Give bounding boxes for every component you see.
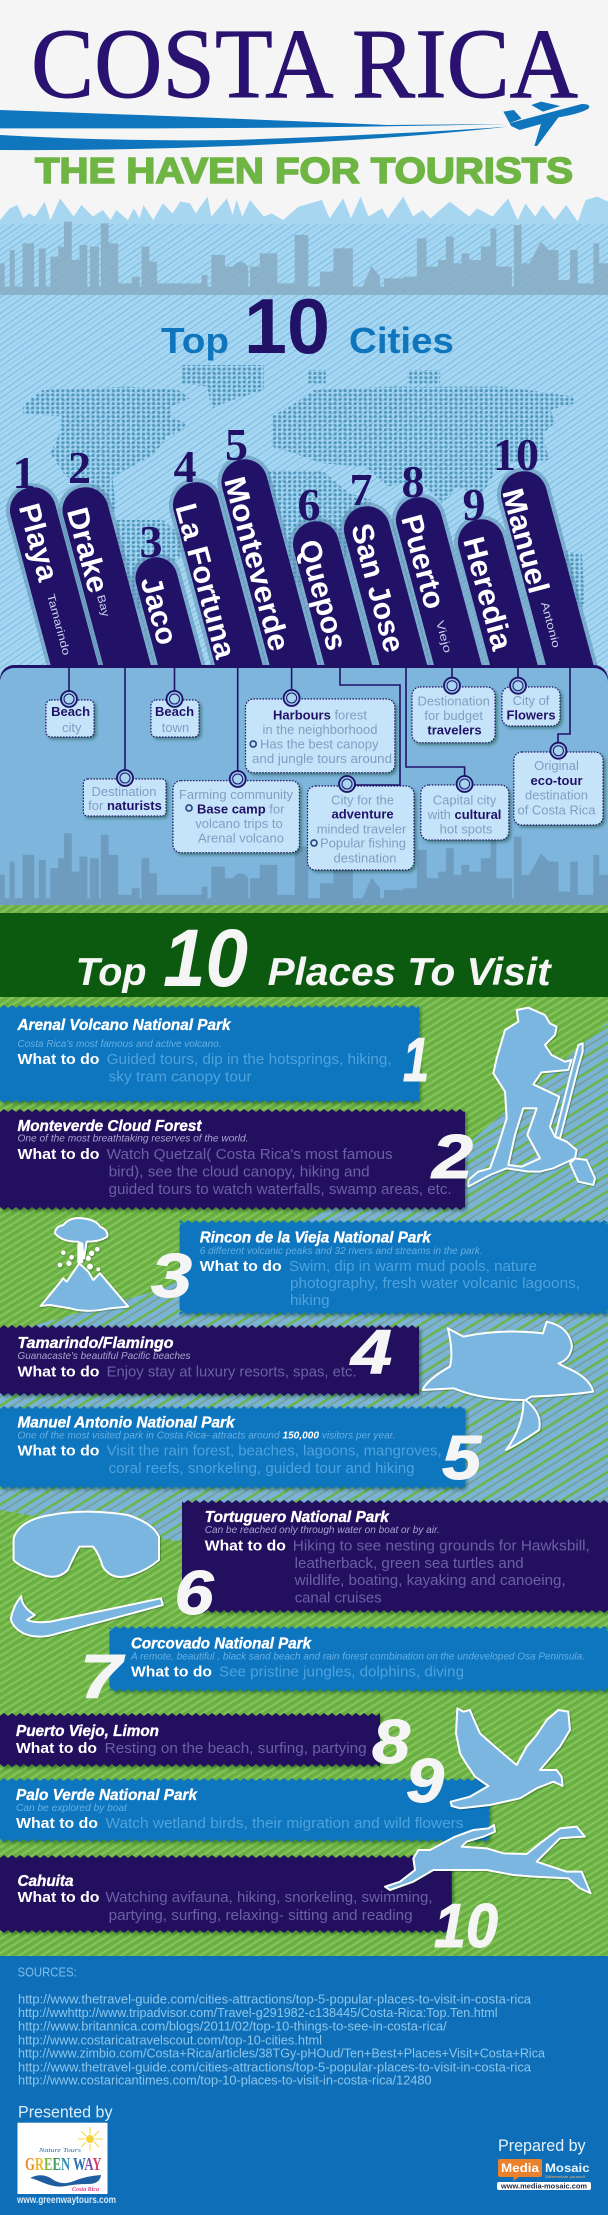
number 10: 10 bbox=[434, 1892, 498, 1961]
place 8: Puerto Viejo: 8 bbox=[372, 1708, 411, 1777]
place 1: Arenal Volcano: Costa Rica's most famous and active volcano. bbox=[18, 1038, 222, 1050]
callout: Playa: city bbox=[62, 720, 82, 735]
tab 2: Drake Bay: Bay bbox=[94, 594, 112, 619]
place 5: Manuel Antonio: 5 bbox=[442, 1424, 483, 1493]
callout: La Fortuna bbox=[173, 771, 299, 853]
place 5: Manuel Antonio bbox=[0, 1406, 483, 1493]
callout: San Jose: hot spots bbox=[440, 822, 493, 836]
sources list: http://www.zimbio.com/Costa+Rica/articles/38TGy-pHOud/Ten+Best+Places+Visit+Costa+Rica bbox=[18, 2046, 546, 2061]
tab 4: La Fortuna: La Fortuna bbox=[169, 500, 242, 662]
logo: Green Way Tours: Nature Tours bbox=[38, 2147, 82, 2154]
callout: Quepos bbox=[308, 776, 414, 870]
tab 10: Manuel Antonio: 10 bbox=[493, 429, 539, 480]
place 5: Manuel Antonio: What to do bbox=[18, 1444, 100, 1460]
tab 1: Playa Tamarindo: Tamarindo bbox=[44, 593, 72, 657]
place 3: Rincon de la Vieja: What to do bbox=[200, 1259, 282, 1275]
tab 8: Puerto Viejo: 8 bbox=[402, 456, 424, 507]
callout: La Fortuna: Arenal volcano bbox=[198, 830, 284, 846]
sources list bbox=[18, 1991, 546, 2088]
place 3: Rincon de la Vieja: Rincon de la Vieja National Park bbox=[200, 1230, 432, 1247]
place 3: Rincon de la Vieja: photography, fresh water volcanic lagoons, bbox=[290, 1275, 580, 1292]
callout: Monteverde: in the neighborhood bbox=[263, 722, 377, 737]
heading: top 10 cities bbox=[161, 282, 454, 370]
tab 7: San Jose: San Jose bbox=[344, 520, 410, 656]
place 7: Corcovado: What to do bbox=[131, 1665, 212, 1681]
logo: Media Mosaic: Media bbox=[501, 2161, 539, 2175]
tab 10: Manuel Antonio: Manuel bbox=[495, 485, 555, 597]
place 6: Tortuguero: Hiking to see nesting grounds for Hawksbill, bbox=[293, 1538, 590, 1555]
place 6: Tortuguero: wildlife, boating, kayaking and canoeing, bbox=[294, 1572, 566, 1589]
tab 8: Puerto Viejo: Viejo bbox=[433, 619, 453, 654]
tab 8: Puerto Viejo bbox=[386, 456, 506, 756]
tab 3: Jaco: Jaco bbox=[134, 573, 183, 648]
place 2: Monteverde Cloud Forest: What to do bbox=[18, 1147, 100, 1163]
place 1: Arenal Volcano bbox=[0, 1005, 429, 1103]
callout: Puerto Viejo: travelers bbox=[427, 722, 482, 738]
tab 10: Manuel Antonio bbox=[491, 429, 608, 730]
sources list: http://www.costaricantimes.com/top-10-places-to-visit-in-costa-rica/12480 bbox=[18, 2073, 432, 2088]
callout: Puerto Viejo: Destionation bbox=[418, 694, 490, 708]
place 5: Manuel Antonio: coral reefs, snorkeling, guided tour and hiking bbox=[109, 1460, 415, 1477]
place 4: Tamarindo Flamingo: What to do bbox=[18, 1365, 100, 1381]
tab 8: Puerto Viejo: Puerto bbox=[394, 511, 451, 613]
place 6: Tortuguero bbox=[174, 1500, 608, 1628]
icon: plane with contrails bbox=[0, 102, 589, 150]
place 6: Tortuguero: canal cruises bbox=[295, 1590, 382, 1607]
callout: Quepos: adventure bbox=[332, 806, 394, 822]
sources heading: SOURCES: bbox=[18, 1966, 77, 1980]
icon: hiker bbox=[468, 1008, 595, 1187]
place 5: Manuel Antonio: Visit the rain forest, beaches, lagoons, mangroves, bbox=[107, 1443, 442, 1460]
callout: Heredia bbox=[502, 678, 560, 726]
callout: Manuel Antonio: Original bbox=[534, 758, 579, 773]
callout: Monteverde bbox=[246, 690, 395, 773]
heading: top 10 cities: 10 bbox=[244, 282, 330, 370]
callout: La Fortuna: volcano trips to bbox=[195, 816, 283, 831]
callout: Manuel Antonio bbox=[514, 743, 603, 825]
logo: Green Way Tours bbox=[18, 2123, 108, 2194]
place 6: Tortuguero: What to do bbox=[205, 1539, 286, 1555]
website: green way tours: www.greenwaytours.com bbox=[16, 2194, 116, 2206]
panel: sky background bbox=[0, 197, 608, 917]
tab 5: Monteverde: 5 bbox=[225, 419, 248, 470]
tab 4: La Fortuna bbox=[163, 441, 283, 741]
place 8: Puerto Viejo: What to do bbox=[16, 1741, 97, 1757]
callout: Manuel Antonio: of Costa Rica bbox=[517, 802, 596, 818]
panel: city descriptions bbox=[0, 665, 608, 907]
heading: top 10 cities: Top bbox=[161, 320, 229, 361]
tab 2: Drake Bay: Drake bbox=[60, 504, 114, 597]
tab 7: San Jose bbox=[334, 464, 454, 765]
tab 9: Heredia: 9 bbox=[462, 479, 486, 530]
sources list: http://www.costaricatravelscout.com/top-10-cities.html bbox=[18, 2032, 322, 2047]
logo: Media Mosaic bbox=[497, 2159, 591, 2191]
place 9: Palo Verde: What to do bbox=[16, 1816, 98, 1832]
place 4: Tamarindo Flamingo bbox=[0, 1318, 419, 1396]
place 8: Puerto Viejo: Puerto Viejo, Limon bbox=[16, 1723, 159, 1740]
place 5: Manuel Antonio: One of the most visited park in Costa Rica- attracts around 150,000 visitors per year. bbox=[18, 1430, 396, 1442]
connector lines bbox=[69, 668, 570, 785]
tab 9: Heredia: Heredia bbox=[456, 533, 518, 654]
tab 1: Playa Tamarindo: Playa bbox=[12, 500, 64, 585]
tab 10: Manuel Antonio: Antonio bbox=[538, 601, 562, 649]
place 7: Corcovado: See pristine jungles, dolphins, diving bbox=[219, 1664, 464, 1681]
logo: Media Mosaic: Differentiate yourself bbox=[545, 2174, 586, 2179]
place 9: Palo Verde: Palo Verde National Park bbox=[16, 1787, 198, 1804]
place 4: Tamarindo Flamingo: Enjoy stay at luxury resorts, spas, etc. bbox=[107, 1364, 357, 1381]
place 7: Corcovado: A remote, beautiful , black sand beach and rain forest combination on the undeveloped Osa Peninsula. bbox=[130, 1650, 585, 1662]
tab 4: La Fortuna: 4 bbox=[174, 441, 196, 492]
tab 3: Jaco: 3 bbox=[140, 516, 162, 567]
place 9: Palo Verde: Watch wetland birds, their migration and wild flowers bbox=[106, 1815, 464, 1832]
place 2: Monteverde Cloud Forest: One of the most breathtaking reserves of the world. bbox=[18, 1133, 248, 1145]
heading band: top 10 places to visit: 10 bbox=[163, 913, 248, 1004]
tab 2: Drake Bay: 2 bbox=[68, 442, 91, 493]
icon: volcano bbox=[41, 1218, 128, 1311]
place 10: Cahuita: Cahuita bbox=[18, 1873, 74, 1890]
callout: Jaco: Beach bbox=[155, 704, 194, 719]
icon: swimmer bbox=[385, 1825, 591, 1893]
callout: Manuel Antonio: eco-tour bbox=[530, 773, 582, 788]
place 5: Manuel Antonio: Manuel Antonio National Park bbox=[18, 1415, 236, 1432]
callout: Drake Bay: Destination bbox=[91, 784, 157, 799]
world map of dots bbox=[23, 365, 586, 613]
callout: Drake Bay bbox=[83, 770, 166, 816]
place 1: Arenal Volcano: sky tram canopy tour bbox=[109, 1069, 252, 1086]
place 3: Rincon de la Vieja: hiking bbox=[290, 1292, 330, 1309]
callout: Heredia: City of bbox=[513, 693, 550, 708]
callout: Playa bbox=[46, 691, 94, 737]
tab 2: Drake Bay bbox=[52, 442, 173, 746]
place 6: Tortuguero: Tortuguero National Park bbox=[205, 1509, 390, 1526]
sources list: http://www.thetravel-guide.com/cities-attractions/top-5-popular-places-to-visit-in-costa-rica bbox=[18, 1991, 532, 2006]
place 8: Puerto Viejo: Resting on the beach, surfing, partying bbox=[105, 1740, 367, 1757]
tab 9: Heredia bbox=[448, 479, 568, 778]
tagline: THE HAVEN FOR TOURISTS bbox=[35, 150, 573, 191]
callout: La Fortuna: Base camp for bbox=[197, 802, 285, 816]
place 1: Arenal Volcano: 1 bbox=[403, 1026, 429, 1095]
place 6: Tortuguero: leatherback, green sea turtles and bbox=[295, 1555, 524, 1572]
place 4: Tamarindo Flamingo: 4 bbox=[349, 1318, 392, 1387]
sources list: http://www.britannica.com/blogs/2011/02/top-10-things-to-see-in-costa-rica/ bbox=[18, 2019, 447, 2034]
icon: sea turtle bbox=[423, 1322, 593, 1450]
callout: Drake Bay: for naturists bbox=[88, 798, 162, 813]
tab 6: Quepos: Quepos bbox=[292, 536, 353, 654]
place 9: Palo Verde: Can be explored by boat bbox=[16, 1802, 128, 1814]
tab 1: Playa Tamarindo: 1 bbox=[12, 447, 36, 498]
place 1: Arenal Volcano: Guided tours, dip in the hotsprings, hiking, bbox=[107, 1051, 392, 1068]
callout: Playa: Beach bbox=[51, 704, 90, 719]
prepared by heading: Prepared by bbox=[498, 2136, 586, 2155]
presented by heading: Presented by bbox=[18, 2103, 113, 2122]
skyline: lower city bbox=[0, 833, 608, 907]
panel: footer bbox=[0, 1956, 608, 2215]
place 6: Tortuguero: Can be reached only through water on boat or by air. bbox=[205, 1524, 440, 1536]
skyline: upper city bbox=[0, 222, 608, 295]
callout: Monteverde: and jungle tours around bbox=[252, 751, 392, 766]
place 7: Corcovado: 7 bbox=[80, 1643, 125, 1712]
callout: Puerto Viejo: for budget bbox=[424, 708, 483, 723]
callout: Jaco bbox=[151, 691, 199, 737]
tab 5: Monteverde bbox=[211, 419, 337, 737]
panel: green places background bbox=[0, 905, 608, 1957]
callout: Quepos: destination bbox=[334, 850, 396, 866]
tab 1: Playa Tamarindo bbox=[0, 447, 120, 746]
callout: Quepos: minded traveler bbox=[317, 822, 407, 836]
logo: Green Way Tours: GREEN WAY bbox=[25, 2154, 102, 2174]
place 6: Tortuguero: 6 bbox=[174, 1559, 214, 1628]
place 7: Corcovado bbox=[80, 1626, 608, 1712]
callout: La Fortuna: Farming community bbox=[179, 787, 294, 802]
place 3: Rincon de la Vieja bbox=[151, 1220, 608, 1315]
place 2: Monteverde Cloud Forest bbox=[0, 1109, 473, 1210]
logo: Green Way Tours: Costa Rica bbox=[72, 2187, 99, 2193]
logo: Media Mosaic: Mosaic bbox=[545, 2161, 590, 2175]
icon: goggles and snorkel bbox=[11, 1512, 163, 1637]
place 2: Monteverde Cloud Forest: Watch Quetzal( Costa Rica's most famous bbox=[107, 1146, 393, 1163]
place 9: Palo Verde: 9 bbox=[406, 1747, 445, 1816]
tab 6: Quepos: 6 bbox=[298, 479, 320, 530]
sources list: http://www.thetravel-guide.com/cities-attractions/top-5-popular-places-to-visit-in-costa-rica bbox=[18, 2059, 532, 2074]
heading band: top 10 places to visit: Places To Visit bbox=[268, 951, 553, 994]
title: COSTA RICA bbox=[31, 8, 578, 119]
callout: San Jose bbox=[421, 776, 509, 840]
callout: Puerto Viejo bbox=[412, 678, 495, 743]
callout: San Jose: Capital city bbox=[433, 792, 497, 808]
place 2: Monteverde Cloud Forest: Monteverde Cloud Forest bbox=[18, 1118, 202, 1135]
icon: bird bbox=[451, 1708, 570, 1808]
callout: San Jose: with cultural bbox=[427, 807, 501, 822]
place 10: Cahuita: partying, surfing, relaxing- sitting and reading bbox=[109, 1907, 413, 1924]
place 2: Monteverde Cloud Forest: guided tours to watch waterfalls, swamp areas, etc. bbox=[109, 1181, 452, 1198]
tab 3: Jaco bbox=[126, 516, 242, 816]
callout: Heredia: Flowers bbox=[506, 708, 556, 722]
callout: Monteverde: Has the best canopy bbox=[260, 736, 379, 752]
logo: Media Mosaic: www.media-mosaic.com bbox=[500, 2182, 587, 2191]
callout: Manuel Antonio: destination bbox=[525, 788, 588, 802]
place 10: Cahuita: Watching avifauna, hiking, snorkeling, swimming, bbox=[106, 1889, 432, 1906]
place 7: Corcovado: Corcovado National Park bbox=[131, 1635, 312, 1652]
callout: Quepos: Popular fishing bbox=[320, 836, 406, 850]
place 2: Monteverde Cloud Forest: bird), see the cloud canopy, hiking and bbox=[109, 1164, 370, 1181]
tab 6: Quepos bbox=[283, 479, 403, 780]
chart: ten city tabs bbox=[0, 419, 608, 816]
heading band: top 10 places to visit: Top bbox=[76, 951, 147, 994]
place 10: Cahuita bbox=[0, 1855, 452, 1933]
sources list: http://wwhttp://www.tripadvisor.com/Travel-g291982-c138445/Costa-Rica:Top.Ten.html bbox=[18, 2005, 498, 2020]
place 4: Tamarindo Flamingo: Tamarindo/Flamingo bbox=[18, 1335, 174, 1352]
place 1: Arenal Volcano: What to do bbox=[18, 1052, 100, 1068]
tab 5: Monteverde: Monteverde bbox=[217, 473, 295, 655]
place 3: Rincon de la Vieja: 3 bbox=[151, 1242, 192, 1311]
place 4: Tamarindo Flamingo: Guanacaste's beautiful Pacific beaches bbox=[18, 1350, 191, 1362]
tab 7: San Jose: 7 bbox=[350, 464, 372, 515]
place 10: Cahuita: What to do bbox=[18, 1890, 100, 1906]
callout: Monteverde: Harbours forest bbox=[273, 708, 367, 722]
heading: top 10 cities: Cities bbox=[349, 320, 454, 361]
place 9: Palo Verde bbox=[0, 1747, 489, 1842]
callout: Quepos: City for the bbox=[331, 792, 394, 808]
place 2: Monteverde Cloud Forest: 2 bbox=[431, 1123, 473, 1192]
place 3: Rincon de la Vieja: Swim, dip in warm mud pools, nature bbox=[289, 1258, 537, 1275]
callout: Jaco: town bbox=[162, 720, 189, 735]
heading band: top 10 places to visit bbox=[0, 913, 608, 1004]
place 1: Arenal Volcano: Arenal Volcano National Park bbox=[17, 1017, 232, 1034]
place 8: Puerto Viejo bbox=[0, 1708, 411, 1777]
place 3: Rincon de la Vieja: 6 different volcanic peaks and 32 rivers and streams in the park. bbox=[200, 1245, 483, 1257]
